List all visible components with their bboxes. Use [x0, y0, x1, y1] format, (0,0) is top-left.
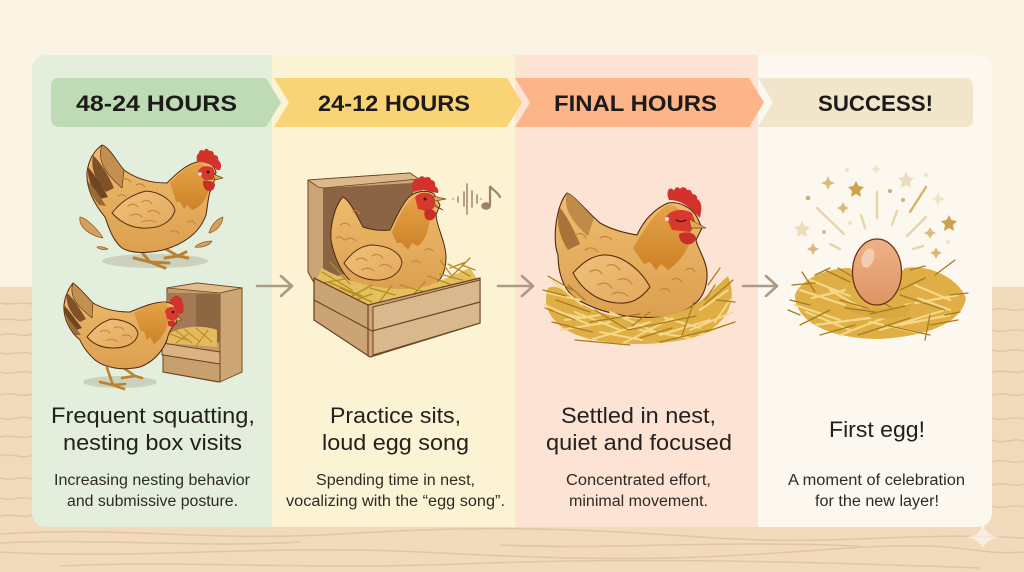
- text block: stage two: vocalizing with the “egg song”.: [286, 493, 505, 510]
- text block: stage one: [51, 403, 255, 510]
- text block: stage one: Increasing nesting behavior: [54, 472, 250, 489]
- icon: sound wave and music note: [453, 184, 500, 214]
- text block: stage four: A moment of celebration: [788, 472, 965, 489]
- panel: final hours: [515, 55, 758, 527]
- icon: corner sparkle watermark: [966, 522, 1000, 548]
- text block: stage two: [286, 403, 505, 510]
- text block: stage three: minimal movement.: [569, 493, 708, 510]
- text block: stage two: loud egg song: [322, 430, 469, 455]
- text block: stage three: Concentrated effort,: [566, 472, 711, 489]
- arrow: stage one to two: [257, 276, 292, 296]
- icon: hen singing in wooden box: [308, 173, 480, 357]
- text block: stage three: Settled in nest,: [561, 403, 716, 428]
- icon: squatting hen with loose feathers: [80, 145, 223, 268]
- banner: 24-12 hours: [274, 78, 522, 127]
- icon: hen peeking into nesting box: [64, 283, 242, 389]
- text block: stage four: First egg!: [829, 417, 925, 442]
- banner: 48-24 hours: 48-24 HOURS: [76, 91, 237, 116]
- text block: stage two: Spending time in nest,: [316, 472, 475, 489]
- text block: stage one: nesting box visits: [63, 430, 242, 455]
- banner: success: [758, 78, 973, 127]
- banner: final hours: FINAL HOURS: [554, 91, 717, 116]
- text block: stage one: Frequent squatting,: [51, 403, 255, 428]
- panel: 24-12 hours: [272, 55, 515, 527]
- text block: stage two: Practice sits,: [330, 403, 461, 428]
- icon: first egg in straw nest: [788, 239, 968, 340]
- panel: success: [758, 55, 992, 527]
- icon: sparkles and celebration rays: [794, 164, 957, 259]
- panel: 48-24 hours: [32, 55, 274, 527]
- banner: success: SUCCESS!: [818, 91, 933, 116]
- banner: final hours: [515, 78, 764, 127]
- arrow: stage two to three: [498, 276, 533, 296]
- text block: stage one: and submissive posture.: [67, 493, 238, 510]
- arrow: stage three to four: [743, 276, 777, 296]
- icon: settled hen in straw nest: [543, 187, 735, 345]
- text block: stage three: quiet and focused: [546, 430, 732, 455]
- text block: stage four: [788, 417, 965, 510]
- text block: stage three: [546, 403, 732, 510]
- text block: stage four: for the new layer!: [815, 493, 939, 510]
- banner: 48-24 hours: [51, 78, 281, 127]
- banner: 24-12 hours: 24-12 HOURS: [318, 91, 470, 116]
